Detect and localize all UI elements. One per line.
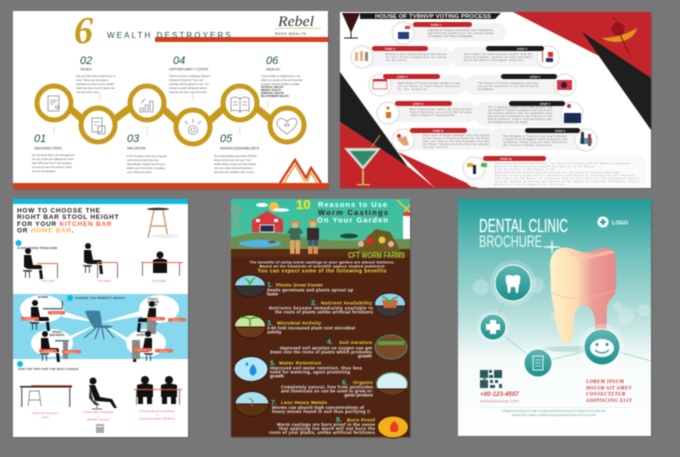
step 04: hand so you don't miss the costs. xyxy=(169,90,208,94)
step descriptions: of Trustees in the House of Delegates. xyxy=(428,35,473,38)
item number eight xyxy=(269,417,376,435)
item number eight: Worm castings are burn proof in the sense xyxy=(277,422,376,427)
item number two: the roots of plants unlike artificial fertilizers xyxy=(275,310,374,314)
item number four: Soil Aeration xyxy=(339,340,372,346)
item number four: growth xyxy=(358,354,372,358)
windmill right xyxy=(397,200,410,239)
step headers: STEP 4 xyxy=(397,75,407,79)
step 06: affect our quality of life and financial xyxy=(261,78,303,82)
salmon measurement tags: 105-115 xyxy=(160,351,169,353)
step 06: 06 xyxy=(266,55,279,67)
chair xyxy=(84,310,114,339)
item number six xyxy=(281,380,374,398)
icon: plus button xyxy=(476,310,510,344)
step 02: cost you even more. xyxy=(76,90,100,94)
step pills xyxy=(352,23,646,187)
step descriptions: the House of Trustees delegates vote and enters xyxy=(488,109,553,112)
item number six: and chemicals so can be used to grow or- xyxy=(281,388,374,394)
step descriptions: Court of Trustees, receives an email and ballot xyxy=(464,56,532,59)
item number three: activity xyxy=(267,330,282,334)
step descriptions: Each Chair/Leader tallies the votes by their xyxy=(410,108,472,111)
heading xyxy=(296,197,388,224)
step descriptions: a majority of delegates voted to approve the xyxy=(503,138,568,141)
item number six: Completely natural, free from pesticides xyxy=(281,384,374,390)
bubble figures xyxy=(30,300,157,362)
item number three xyxy=(267,320,355,334)
item number two: Nutrients become immediately available to xyxy=(269,306,373,310)
step 06: process. Destroy health is wealth! xyxy=(261,82,300,86)
step 05: KNOWLEDGE/BELIEFS xyxy=(220,146,260,150)
item number seven: heavy metals found in soil thus purifying it xyxy=(272,409,371,414)
item number six: 6. xyxy=(342,380,348,387)
section two label: CHOOSE THE PERFECT HEIGHT xyxy=(75,296,125,300)
item image details xyxy=(240,277,398,432)
salmon measurement tags: 90-92 cm xyxy=(172,320,182,322)
item images xyxy=(234,275,408,438)
step 04: should consider all factors before xyxy=(169,86,208,90)
step 01: fee can erode your balance by more xyxy=(32,157,74,161)
panel: worm castings xyxy=(231,197,410,438)
step 06: If your health is unbalanced, it can xyxy=(261,74,301,78)
panel: voting process xyxy=(340,12,651,188)
section three label: OUR TOP TIPS FOR THE BEST CHOICE xyxy=(18,367,79,371)
salmon measurement tags: 76-80 cm xyxy=(137,350,147,352)
step headers: STEP 6 xyxy=(413,102,423,106)
intro xyxy=(250,260,394,274)
title bar xyxy=(360,13,501,19)
step headers: STEP 2 xyxy=(385,47,395,51)
salmon measurement tags: 74-76 cm xyxy=(43,351,53,353)
item number eight: 8. xyxy=(336,417,342,424)
tip captions: mind xyxy=(42,415,49,419)
item number one xyxy=(267,282,353,296)
item number seven: Less Heavy Metals xyxy=(281,400,327,406)
item number five: growth xyxy=(270,374,284,378)
step descriptions: on the ballot in their House Sessions, xyxy=(398,85,460,88)
item number seven: Worms can absorb high concentrations of xyxy=(272,405,365,410)
heading: 10 xyxy=(296,197,310,212)
lorem list: CONSECTETUR xyxy=(586,392,626,398)
step headers: STEP 3 xyxy=(517,47,527,51)
item number seven xyxy=(271,400,371,414)
step descriptions: House Session. Chairs and Delegates sign xyxy=(488,118,553,121)
step headers xyxy=(372,22,580,161)
bottom red bar xyxy=(13,183,328,189)
step 06: SPIRITUAL HEALTH xyxy=(261,92,284,95)
step 02: TAXES xyxy=(80,68,92,72)
icon: document button xyxy=(520,345,556,381)
item number eight: roots of your plants, unlike artificial fertilizers xyxy=(269,430,376,435)
salmon measurement tags: 60-66 cm xyxy=(151,319,161,321)
step 01: than 25% over time? Just because xyxy=(32,161,72,165)
step 02: Pay your fair share of taxes but no xyxy=(76,74,116,78)
problem captions: TOO HIGH xyxy=(97,279,111,283)
step 02: significant amount of your wealth. xyxy=(76,82,115,86)
tip: two figures at counter xyxy=(134,376,182,405)
item number four: down into the roots of plants which promotes xyxy=(270,350,373,354)
step descriptions: Step 11: Result of Voting and Record of the House of Trustees, Delegates, Chairs. xyxy=(495,180,641,183)
step descriptions: Cascade of Trustees determines voter registration xyxy=(428,29,494,32)
step 05 xyxy=(214,133,260,174)
step descriptions: the House Trustee presents the final session xyxy=(423,143,490,146)
bubble captions: EXTRA TALL xyxy=(137,334,152,337)
step 04: OPPORTUNITY COSTS xyxy=(169,68,209,72)
intro: You can expect some of the following benefits xyxy=(258,268,387,274)
step 01: Do you know that a 1% management xyxy=(32,153,75,157)
step 04 xyxy=(169,55,211,94)
panel: dental clinic brochure xyxy=(458,199,651,436)
step 06: PHYSICAL HEALTH xyxy=(261,86,283,89)
item number three: Microbial Activity xyxy=(277,320,321,326)
step 04: instead of Option B. Time and xyxy=(169,78,204,82)
item number eight: Burn Proof xyxy=(347,418,375,424)
phone: +00-123-4567 xyxy=(480,391,519,398)
step 06 xyxy=(261,55,303,98)
tip captions xyxy=(32,409,176,422)
step 03: INFLATION xyxy=(127,146,146,150)
farm name: CFT WORM FARMS xyxy=(348,251,405,260)
bubble captions: SEATING xyxy=(38,296,48,299)
tooth illustration xyxy=(542,248,618,352)
item number one: Seeds germinate and plants sprout up xyxy=(267,288,353,292)
step 01 xyxy=(32,133,75,173)
windmill left xyxy=(231,205,241,230)
section two label xyxy=(67,295,125,301)
step descriptions: by their House Leadership for voting xyxy=(386,56,447,59)
footnote xyxy=(502,410,606,417)
panel: bar stool guide xyxy=(13,199,188,437)
salmon measurement tags: 100-105 cm xyxy=(65,352,77,354)
step descriptions: on the ballot. xyxy=(386,59,408,62)
step 01: you do not see a fee doesn't mean xyxy=(32,165,72,169)
intro: The benefits of using worm castings in your garden are almost limitless. xyxy=(250,260,394,264)
tip: figure in office chair xyxy=(89,378,117,409)
step descriptions: The delegate of Trustees vote total indicates xyxy=(503,135,568,138)
logo xyxy=(275,14,321,36)
mountains icon xyxy=(280,160,321,183)
intro: Based on the hundreds of scientific papers studied published xyxy=(260,264,385,268)
heading: RIGHT BAR STOOL HEIGHT xyxy=(17,214,119,221)
item number five xyxy=(270,360,363,378)
blue band xyxy=(13,294,188,359)
step descriptions: Reporting of the results and the minutes for the Court of Trustees meetings. xyxy=(495,171,620,174)
lorem list: ADIPISCING ELIT xyxy=(585,399,633,404)
step descriptions: the process decision from the submitted votes xyxy=(488,112,553,115)
icon: dark glass xyxy=(342,13,360,38)
red header bar xyxy=(155,37,328,42)
cyan top bar xyxy=(13,199,188,204)
problem captions: TOO WIDE xyxy=(152,279,166,283)
red sliver bottom xyxy=(398,152,478,188)
red corner bottom left xyxy=(340,122,435,188)
ground xyxy=(231,232,410,250)
big gold six: 6 xyxy=(74,10,93,52)
step descriptions: Each House of Trustee member decides to vote xyxy=(398,82,461,85)
item number two: 2. xyxy=(311,300,317,307)
logo: Rebel xyxy=(277,14,314,30)
lorem list xyxy=(585,380,633,404)
step descriptions: and balloting deadlines for the coming Voting xyxy=(428,32,494,35)
black band bottom left xyxy=(340,72,408,167)
section one label: AVOID THESE PROBLEMS xyxy=(17,246,58,250)
step descriptions: House Sessions, and enters the delegate xyxy=(410,111,473,114)
logo: LOGO xyxy=(612,220,629,226)
subheading: BROCHURE xyxy=(479,232,542,251)
heading: HOUSE OF TVBNVP VOTING PROCESS xyxy=(375,14,492,20)
icon: smile button xyxy=(579,324,625,370)
step 06: MENTAL HEALTH xyxy=(261,89,281,92)
step headers: STEP 1 xyxy=(431,23,441,27)
item number four: 4. xyxy=(327,339,333,346)
step descriptions: the Trustees record in the portal. xyxy=(488,121,528,124)
step 01: you are not paying it. xyxy=(32,169,56,173)
step descriptions: by deadline. xyxy=(478,89,494,91)
heading: On Your Garden xyxy=(317,216,388,224)
step 01: 01 xyxy=(34,133,46,145)
farmers xyxy=(287,220,319,254)
icon: bar stool xyxy=(147,208,179,238)
step 04: 04 xyxy=(173,55,185,67)
tip captions: + xyxy=(97,414,99,418)
step 03: your retirement years. xyxy=(127,170,153,174)
step icons xyxy=(355,26,592,174)
bubble captions: STOOLS xyxy=(52,331,62,334)
icon: tooth button xyxy=(490,260,536,306)
step 04: There is a cost to selecting Option A xyxy=(169,74,211,78)
step headers: STEP 10 xyxy=(500,157,512,161)
heading: Worm Castings xyxy=(318,208,388,217)
step descriptions: votes in House of Trustees portal. xyxy=(410,114,455,117)
item number one: faster xyxy=(267,292,279,296)
step 03: A 3% increase in the cost of goods xyxy=(127,154,167,158)
step descriptions: by the deadline. xyxy=(398,88,428,91)
tip captions: A stool with a backrest xyxy=(83,410,114,414)
tip captions: Ultimate comfort xyxy=(87,418,109,422)
sparkle xyxy=(543,240,561,254)
lorem list: DOLOR SIT AMET xyxy=(585,386,632,392)
step descriptions: after the close of the final Delegate vote and xyxy=(423,140,490,143)
problem figures xyxy=(23,243,183,279)
item number one: 1. xyxy=(267,282,273,289)
step 06: RELATIONSHIP HEALTH xyxy=(261,95,289,98)
connector lines xyxy=(458,271,651,363)
step descriptions: to the House of Trustees Portal by the Chair xyxy=(423,137,489,140)
icon: cherry and lens xyxy=(602,17,637,54)
tip captions: + xyxy=(156,413,158,417)
white bubbles xyxy=(20,295,179,357)
step 04: earnings will be gained or lost. You xyxy=(169,82,209,86)
step 05: Not understanding the whole TRUTH xyxy=(214,154,257,158)
step descriptions xyxy=(386,29,641,186)
step 03: 03 xyxy=(127,133,140,145)
item number five: Water Retention xyxy=(279,360,321,366)
step 05: about money can cost you. Your xyxy=(214,158,251,162)
bubble captions: STOOLS xyxy=(139,331,149,334)
bubble captions xyxy=(38,296,159,337)
sun and clouds xyxy=(256,202,289,212)
lorem list: LOREM IPSUM xyxy=(585,380,624,385)
pond xyxy=(239,240,281,247)
step headers: STEP 9 xyxy=(555,129,565,133)
website: websitename.com xyxy=(480,398,519,404)
footnote: LOREM IPSUM DOLOR SIT AMET, CONSECTETUR ADIPISCING ELIT. DONEC ID PULVINAR NISI. xyxy=(502,410,606,413)
barn xyxy=(252,211,283,232)
item number seven: 7. xyxy=(271,400,277,407)
red corner top right xyxy=(513,12,651,78)
item number one: Plants Grow Faster xyxy=(276,282,323,288)
step 01: ONGOING FEES xyxy=(34,146,62,150)
step descriptions: The House of Trustee delegates vote and xyxy=(478,82,539,85)
tip captions: A stool without a backrest xyxy=(139,409,175,413)
gold chain timeline xyxy=(37,86,304,144)
step 02: Deferring them into the future can xyxy=(76,86,115,90)
step descriptions: voting results. xyxy=(423,146,449,149)
qr code xyxy=(480,370,502,388)
item number six: Organic xyxy=(353,380,373,386)
small logo xyxy=(96,424,104,433)
step headers: STEP 8 xyxy=(433,129,443,133)
step descriptions: Results of the voting are posted and sent on to the House. xyxy=(495,165,595,168)
item number eight: that applying too much will not burn the xyxy=(279,426,376,431)
step headers: STEP 7 xyxy=(540,102,550,106)
logo: ROCK WEALTH xyxy=(275,32,306,36)
step descriptions: The Chair of the House of Trustees reports the votes for the Delegates ballot. xyxy=(495,177,640,180)
step 05: beliefs about money can also impact xyxy=(214,162,256,166)
step 02 xyxy=(76,55,116,94)
step descriptions: Members are registered and maintained xyxy=(386,53,447,56)
item number four xyxy=(270,339,373,358)
step 03: dramatically change how far your xyxy=(127,162,165,166)
footnote: ROGUM FELIT SAPIEN, INTERDUM SCALIQUAM RHONCUM, MATTIS AT DUM. xyxy=(512,414,596,417)
car xyxy=(340,234,358,238)
item number two xyxy=(269,300,374,314)
step descriptions: The ¾ majority present votes tally decides how xyxy=(488,106,552,109)
item number five: Improved soil water retention, thus less xyxy=(270,366,363,370)
item number five: need for watering, again promoting xyxy=(270,370,350,374)
tip captions: Keep the scotch in xyxy=(32,411,58,415)
step 05: 05 xyxy=(220,133,233,145)
step 02: 02 xyxy=(80,55,92,67)
section one label xyxy=(16,240,58,250)
logo xyxy=(598,216,629,228)
step descriptions: Step 10 results in the House of VP. xyxy=(495,168,555,171)
salmon measurement tags xyxy=(21,311,186,354)
step 03: and services each year can xyxy=(127,158,159,162)
bubble captions: STOOLS xyxy=(148,298,158,301)
step descriptions: that are then recorded by the Trustees in the xyxy=(488,115,553,118)
step 05: and how your children view money. xyxy=(214,170,255,174)
heading: HOW TO CHOOSE THE xyxy=(17,208,101,214)
heading: Reasons to Use xyxy=(318,200,387,209)
item number five: 5. xyxy=(270,360,276,368)
step 06: HEALTH xyxy=(266,68,280,72)
problem captions xyxy=(41,279,166,283)
step descriptions: resolution. These votes are then counted by xyxy=(503,141,568,144)
step descriptions: Conclusion of the Voting Process: the Court of Trustees with the House of Delegates xyxy=(495,162,630,165)
item number three: 3. xyxy=(267,320,273,328)
heading: DENTAL CLINIC xyxy=(479,216,568,236)
step headers: STEP 5 xyxy=(530,75,540,79)
white rays xyxy=(62,311,142,343)
bubble captions: HEIGHT xyxy=(148,304,158,307)
title: WEALTH DESTROYERS xyxy=(107,31,233,40)
panel: wealth destroyers xyxy=(13,10,328,189)
item number two: Nutrient Availability xyxy=(321,300,372,306)
tip captions: maximum space efficiency xyxy=(139,416,176,420)
step 03: dollars go in the future, including xyxy=(127,166,165,170)
tip: stool under desk xyxy=(20,385,72,407)
item number six: ganic produce xyxy=(344,392,374,398)
salmon measurement tags: 70-76 cm xyxy=(51,313,61,315)
heading: FOR YOUR KITCHEN BAR xyxy=(17,221,112,228)
problem captions: TOO LOW xyxy=(41,279,55,283)
icon: cocktail glass xyxy=(344,135,381,186)
step descriptions: Voter hears the ballot process details from the xyxy=(464,53,533,56)
step 03 xyxy=(127,133,167,174)
step 02: more. Taxes can eat away a xyxy=(76,78,109,82)
step descriptions: Vote totals of House delegate votes are posted xyxy=(423,134,490,137)
black band top right xyxy=(582,32,651,130)
salmon measurement tags: 28-30 cm xyxy=(25,319,35,321)
step descriptions: Results of the Delegates for Session. xyxy=(495,183,565,186)
step descriptions: record the decisions in the ballot portal xyxy=(478,85,538,88)
soil strip xyxy=(231,249,410,257)
dotted connectors xyxy=(54,93,268,134)
step circles xyxy=(351,22,597,179)
bubble captions: BAR HEIGHT xyxy=(50,334,65,337)
bubble captions: COUNTER xyxy=(147,301,159,304)
section three label xyxy=(17,361,79,371)
timeline icons xyxy=(48,96,297,134)
vegetable pile xyxy=(356,229,401,252)
item number four: Improved soil aeration so oxygen can get xyxy=(280,346,373,350)
item number three: 3-90 fold increased plant root microbial xyxy=(267,326,355,330)
step descriptions: key to the House of Delegates voting site. xyxy=(464,59,524,62)
step descriptions: the Trustee's ballot committee. xyxy=(503,144,553,147)
heading: OR HOME BAR. xyxy=(17,228,74,234)
sky banner xyxy=(231,199,410,249)
divider xyxy=(480,406,630,408)
step descriptions: Results of Voting Record for Delegates and House of Trustees for the Session. xyxy=(495,174,635,177)
heading xyxy=(17,208,119,234)
soft bokeh xyxy=(473,277,650,324)
step 05: how you make financial decisions xyxy=(214,166,253,170)
